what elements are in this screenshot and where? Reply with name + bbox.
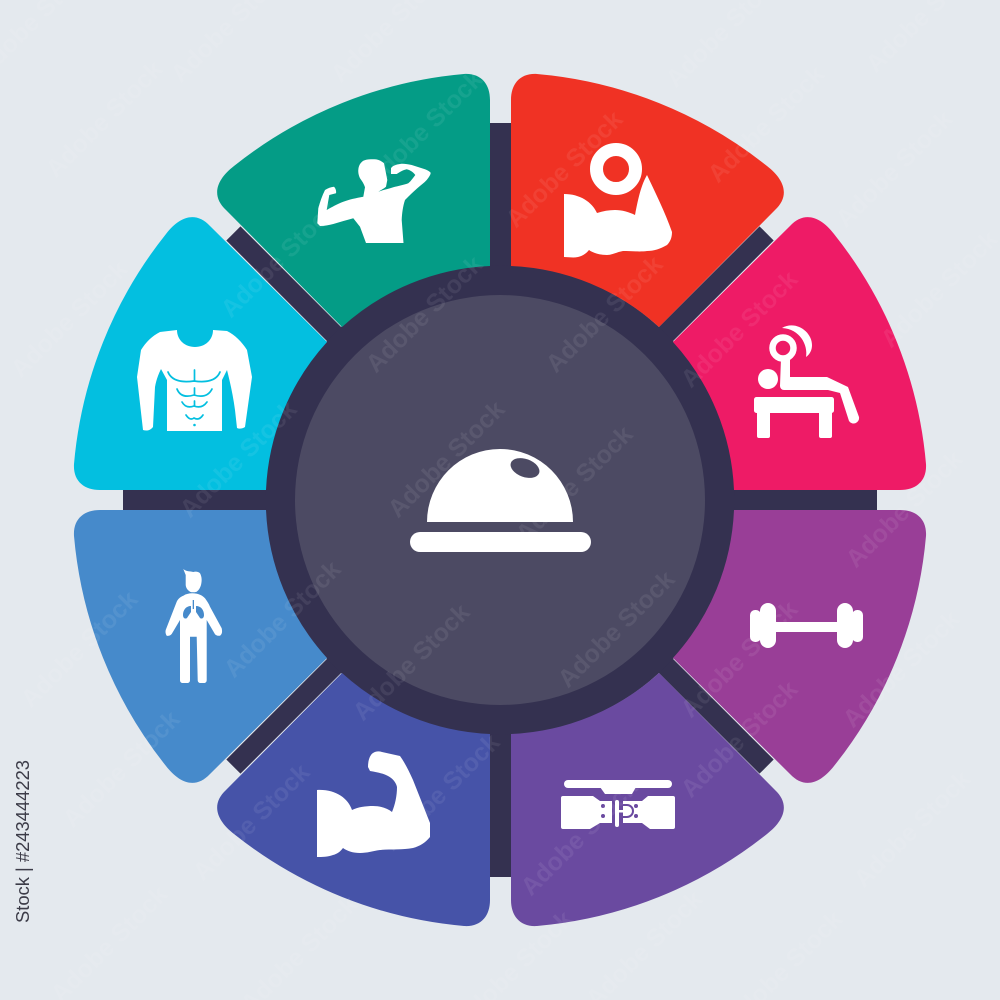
segment: blue bbox=[74, 510, 327, 783]
watermark text: Adobe Stock bbox=[360, 65, 488, 193]
segment: violet bbox=[511, 673, 784, 926]
icon: flexed bicep bbox=[317, 751, 430, 857]
watermark text: Adobe Stock bbox=[510, 420, 638, 548]
wheel spokes bbox=[123, 123, 877, 877]
center ring bbox=[265, 265, 735, 735]
segment: pink bbox=[673, 217, 926, 490]
segment: cyan bbox=[74, 217, 327, 490]
icon: flexing bodybuilder bbox=[317, 159, 431, 243]
watermark text: Adobe Stock bbox=[840, 445, 968, 573]
watermark text: Adobe Stock bbox=[540, 250, 668, 378]
watermark text: Adobe Stock bbox=[218, 555, 346, 683]
watermark text: Adobe Stock bbox=[702, 60, 830, 188]
segment: magenta bbox=[673, 510, 926, 783]
watermark text: Adobe Stock bbox=[382, 395, 510, 523]
watermark text: Adobe Stock bbox=[187, 758, 315, 886]
watermark text: Adobe Stock bbox=[5, 255, 133, 383]
watermark text: Adobe Stock bbox=[875, 225, 1000, 353]
icon: dumbbell bbox=[750, 603, 863, 648]
icon: muscular torso bbox=[137, 330, 252, 431]
watermark text: Adobe Stock bbox=[837, 605, 965, 733]
segment: green bbox=[217, 74, 490, 327]
watermark text: Adobe Stock bbox=[830, 105, 958, 233]
watermark text: Adobe Stock bbox=[552, 565, 680, 693]
watermark text: Adobe Stock bbox=[675, 675, 803, 803]
segment: red bbox=[511, 74, 784, 327]
stock id caption: Stock | #243444223 bbox=[13, 760, 33, 923]
icon: belt with buckle bbox=[561, 780, 675, 829]
segment: indigo bbox=[217, 673, 490, 926]
icon: arm with weight plate bbox=[564, 150, 672, 257]
icon: hat in center bbox=[410, 449, 591, 552]
watermark text: Adobe Stock bbox=[347, 598, 475, 726]
watermark text: Adobe Stock bbox=[515, 773, 643, 901]
watermark text: Adobe Stock bbox=[174, 395, 302, 523]
watermark text: Adobe Stock bbox=[675, 265, 803, 393]
watermark text: Adobe Stock bbox=[360, 250, 488, 378]
watermark text: Adobe Stock bbox=[215, 195, 343, 323]
watermark text: Adobe Stock bbox=[15, 585, 143, 713]
icon: bench press bbox=[754, 325, 859, 438]
watermark text: Adobe Stock bbox=[500, 105, 628, 233]
watermark text: Adobe Stock bbox=[40, 55, 168, 183]
watermark text: Adobe Stock bbox=[675, 595, 803, 723]
watermark text: Adobe Stock bbox=[377, 728, 505, 856]
watermark text: Adobe Stock bbox=[57, 705, 185, 833]
icon: man with lungs bbox=[166, 569, 222, 683]
watermark text: Adobe Stock bbox=[848, 765, 976, 893]
center disc bbox=[295, 295, 705, 705]
